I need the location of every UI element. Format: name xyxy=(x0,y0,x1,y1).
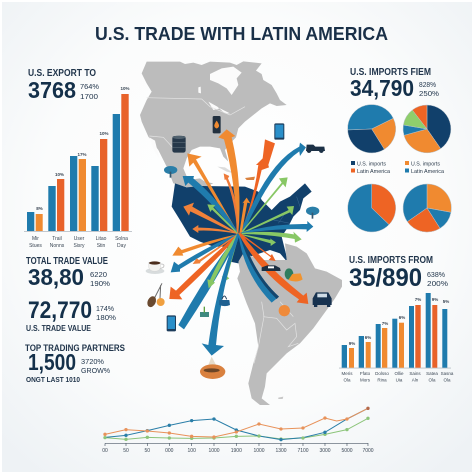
icon: orange badge xyxy=(279,305,290,316)
panel: total trade value: TOTAL TRADE VALUE xyxy=(26,256,108,267)
panel: U.S. imports heading lower: 35/890 xyxy=(349,264,422,292)
line chart: trade over time: 000 xyxy=(165,448,174,454)
panel: top trading partners: GROW% xyxy=(81,366,110,375)
panel: total trade value: 190% xyxy=(90,279,110,288)
bar chart: U.S. imports: Ola xyxy=(443,378,451,382)
bar chart: U.S. imports: Ffato xyxy=(360,371,371,376)
legend: U.S. imports xyxy=(411,162,440,168)
panel: U.S. imports heading top: 250% xyxy=(419,91,439,98)
line chart: trade over time: 1000 xyxy=(208,448,220,454)
panel: top trading partners: 3720% xyxy=(81,357,104,366)
line chart: trade over time: 3000 xyxy=(319,448,331,454)
map: South America with arrows xyxy=(146,233,342,405)
panel: total trade value: 6220 xyxy=(90,270,107,279)
bar chart: U.S. imports: 7% xyxy=(415,297,421,302)
arrows fanning south xyxy=(169,233,308,356)
panel: U.S. imports heading lower: 200% xyxy=(427,279,448,288)
icon: small car xyxy=(262,265,281,271)
bar chart: U.S. exports: 10% xyxy=(55,172,64,177)
icon: large car xyxy=(313,292,332,307)
bar chart: U.S. imports: 9% xyxy=(432,297,438,302)
land: Canada and Mexico xyxy=(140,61,287,190)
bar chart: U.S. imports: Satea xyxy=(426,371,438,376)
bar chart: U.S. imports: Sains xyxy=(409,371,421,376)
bar chart: U.S. exports: 8% xyxy=(36,206,43,211)
panel: U.S. trade value: U.S. TRADE VALUE xyxy=(26,323,91,333)
number: export value: 3768 xyxy=(28,77,76,103)
icon: oil barrel xyxy=(172,136,186,153)
icon: small cargo xyxy=(245,177,255,180)
panel: U.S. imports heading top xyxy=(350,67,439,101)
pie 2 xyxy=(403,105,451,153)
bar chart: U.S. imports: 9% xyxy=(349,341,355,346)
bar chart: U.S. imports: Ollie xyxy=(394,371,404,376)
panel: U.S. trade value: 180% xyxy=(96,313,116,322)
arrows fanning north xyxy=(183,129,313,246)
title: U.S. TRADE WITH LATIN AMERICA xyxy=(95,23,388,44)
panel: top trading partners: 1,500 xyxy=(28,349,76,375)
panel: U.S. trade value: 72,770 xyxy=(28,297,92,324)
bar chart: U.S. imports: Ola xyxy=(343,378,351,382)
bar chart: U.S. imports xyxy=(339,293,454,382)
panel: top trading partners xyxy=(25,343,125,384)
text: export side stats: 764% xyxy=(80,82,99,91)
text: export side stats xyxy=(80,82,99,101)
bar chart: U.S. imports: Ola xyxy=(428,378,436,382)
icon: coffee cup xyxy=(146,261,164,274)
panel: U.S. imports heading lower: 638% xyxy=(427,270,445,279)
pie 4 xyxy=(403,184,451,232)
panel: U.S. imports heading top: 828% xyxy=(419,82,436,89)
bar chart: U.S. imports: 6% xyxy=(399,315,405,320)
panel: total trade value: 38,80 xyxy=(28,264,84,290)
line chart: trade over time: 1300 xyxy=(275,448,287,454)
bar chart: U.S. imports: Dolsso xyxy=(375,371,389,376)
panel: U.S. trade value: 174% xyxy=(96,304,114,313)
land: United States xyxy=(172,183,312,263)
bar chart: U.S. exports: Solna xyxy=(115,236,128,242)
panel: U.S. imports heading lower: U.S. IMPORTS FROM xyxy=(349,254,433,266)
navy land stub xyxy=(230,240,241,263)
pie charts xyxy=(348,105,451,232)
bar chart: U.S. exports: Stues xyxy=(29,243,42,249)
legend: Latin America xyxy=(357,169,391,175)
icon: basket xyxy=(200,307,209,317)
legend: U.S. imports xyxy=(357,162,386,168)
panel: U.S. imports heading top: 34,790 xyxy=(350,75,414,101)
bar chart: U.S. exports xyxy=(24,86,132,249)
icon: bowl xyxy=(200,357,225,379)
map: North America with arrows xyxy=(140,61,325,263)
bar chart: U.S. imports: Mors xyxy=(360,378,371,382)
legend: Latin America xyxy=(411,169,445,175)
icon: phone lower xyxy=(167,315,176,331)
bar chart: U.S. imports: 6% xyxy=(365,335,371,340)
panel: U.S. trade value xyxy=(26,297,116,333)
bar chart: U.S. exports: User xyxy=(74,236,85,242)
icon: tree left xyxy=(164,166,177,178)
bar chart: U.S. imports: Meris xyxy=(342,371,353,376)
panel: U.S. export heading xyxy=(28,67,99,103)
bar chart: U.S. imports: Rina xyxy=(377,378,387,382)
line chart: trade over time: 7100 xyxy=(297,448,309,454)
line chart: trade over time: 100 xyxy=(188,448,196,454)
icon: blue phone xyxy=(274,123,284,140)
bar chart: U.S. exports: Stin xyxy=(97,243,106,249)
bar chart: U.S. imports: 5% xyxy=(443,299,449,304)
bar chart: U.S. imports: Uia xyxy=(396,378,403,382)
panel: U.S. imports heading lower xyxy=(349,254,448,292)
icon: phone with flame xyxy=(213,116,221,133)
line chart: trade over time: 00 xyxy=(102,448,108,454)
bar chart: U.S. exports: Mir xyxy=(32,236,39,242)
land: South America xyxy=(237,243,342,405)
line chart: trade over time: 50 xyxy=(123,448,129,454)
panel: total trade value xyxy=(26,256,110,290)
bar chart: U.S. imports: Aln xyxy=(412,378,419,382)
bar chart: U.S. imports: Sasna xyxy=(441,371,454,376)
pie 3 xyxy=(348,184,396,232)
bar chart: U.S. exports: 17% xyxy=(77,152,87,157)
bar chart: U.S. exports: Nonns xyxy=(50,243,65,249)
line chart: trade over time: 50 xyxy=(145,448,150,454)
text: export side stats: 1700 xyxy=(80,92,98,101)
bar chart: U.S. exports: Day xyxy=(117,243,126,249)
bar chart: U.S. exports: Sisry xyxy=(73,243,85,249)
legend xyxy=(351,161,445,175)
line chart: trade over time xyxy=(102,407,374,454)
line chart: trade over time: 1900 xyxy=(231,448,242,454)
icon: tree right xyxy=(306,207,319,219)
line chart: trade over time: 1000 xyxy=(253,448,265,454)
icon: fruit xyxy=(285,268,303,282)
bar chart: U.S. exports: 10% xyxy=(99,131,109,136)
panel: top trading partners: TOP TRADING PARTNERS xyxy=(25,343,125,354)
icon: vehicle xyxy=(306,145,325,153)
bar chart: U.S. exports: Litao xyxy=(96,236,107,242)
panel: top trading partners: ONGT LAST 1010 xyxy=(26,375,80,384)
pie 1 xyxy=(348,105,396,153)
icon: maracas xyxy=(146,283,165,308)
bar chart: U.S. exports: 10% xyxy=(120,86,130,91)
label: export heading: U.S. EXPORT TO xyxy=(28,67,96,79)
panel: U.S. imports heading top: U.S. IMPORTS FIEM xyxy=(350,67,431,78)
line chart: trade over time: 7000 xyxy=(362,448,374,454)
line chart: trade over time: 5000 xyxy=(341,448,353,454)
icon: handbag xyxy=(219,296,230,306)
bar chart: U.S. imports: 7% xyxy=(382,321,388,326)
bar chart: U.S. exports: Trail xyxy=(52,236,62,242)
